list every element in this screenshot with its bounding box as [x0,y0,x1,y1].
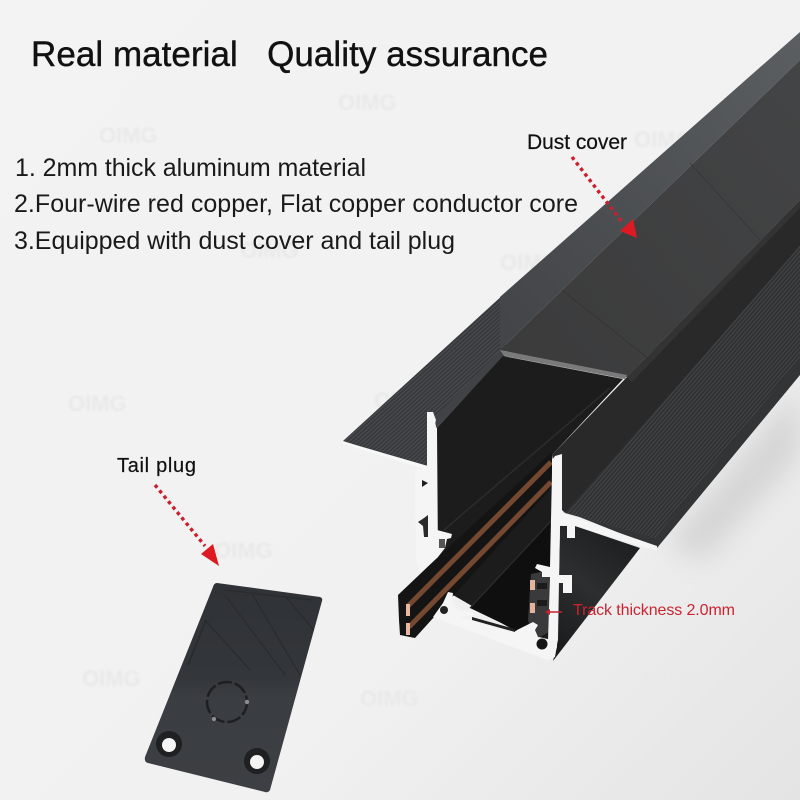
watermarks: OIMG [374,388,433,413]
channel interior [437,356,623,640]
label: tail plug [117,455,219,566]
plug body [145,583,322,792]
watermarks: OIMG [240,238,299,263]
aluminium profile left wall [415,412,452,573]
track rail product illustration [342,32,800,661]
plug screw hole left [156,731,182,757]
base slot [472,617,515,632]
watermarks: OIMG [644,666,703,691]
arrow: track thickness [545,609,562,615]
conductor block [398,452,552,638]
feature list [14,154,578,255]
watermarks: OIMG [82,666,141,691]
feature 3: 3.Equipped with dust cover and tail plug [14,227,455,255]
aluminium profile right wall [535,454,657,660]
rail shadow [665,385,800,560]
title: Real material Quality assurance [31,35,548,74]
dark channel band [552,200,800,513]
dust cover top [500,60,800,379]
aluminium profile base [433,592,557,660]
watermarks [68,90,703,711]
watermarks: OIMG [68,391,127,416]
label: dust cover: Dust cover [527,131,627,154]
copper conductors [408,462,551,606]
top bevel strip [500,32,800,350]
arrow: dust cover [572,157,637,238]
watermarks: OIMG [338,90,397,115]
feature 2: 2.Four-wire red copper, Flat copper conductor core [14,190,578,218]
watermarks: OIMG [634,127,693,152]
watermarks: OIMG [99,123,158,148]
outer lower wall [553,526,640,661]
arrow: tail plug [155,485,219,566]
watermarks: OIMG [214,538,273,563]
label: track thickness: Track thickness 2.0mm [573,602,735,619]
watermarks: OIMG [500,250,559,275]
right contact block [528,570,550,640]
plug centre ring [207,682,247,722]
left ribbed flange [342,293,505,470]
tail plug illustration [145,583,322,792]
right ribbed flange [562,246,800,548]
label: dust cover [527,131,637,238]
watermarks: OIMG [360,686,419,711]
label: tail plug: Tail plug [117,455,196,477]
feature 1: 1. 2mm thick aluminum material [15,154,366,182]
plug screw hole right [244,748,270,774]
plug diagonal ridges [188,590,322,675]
